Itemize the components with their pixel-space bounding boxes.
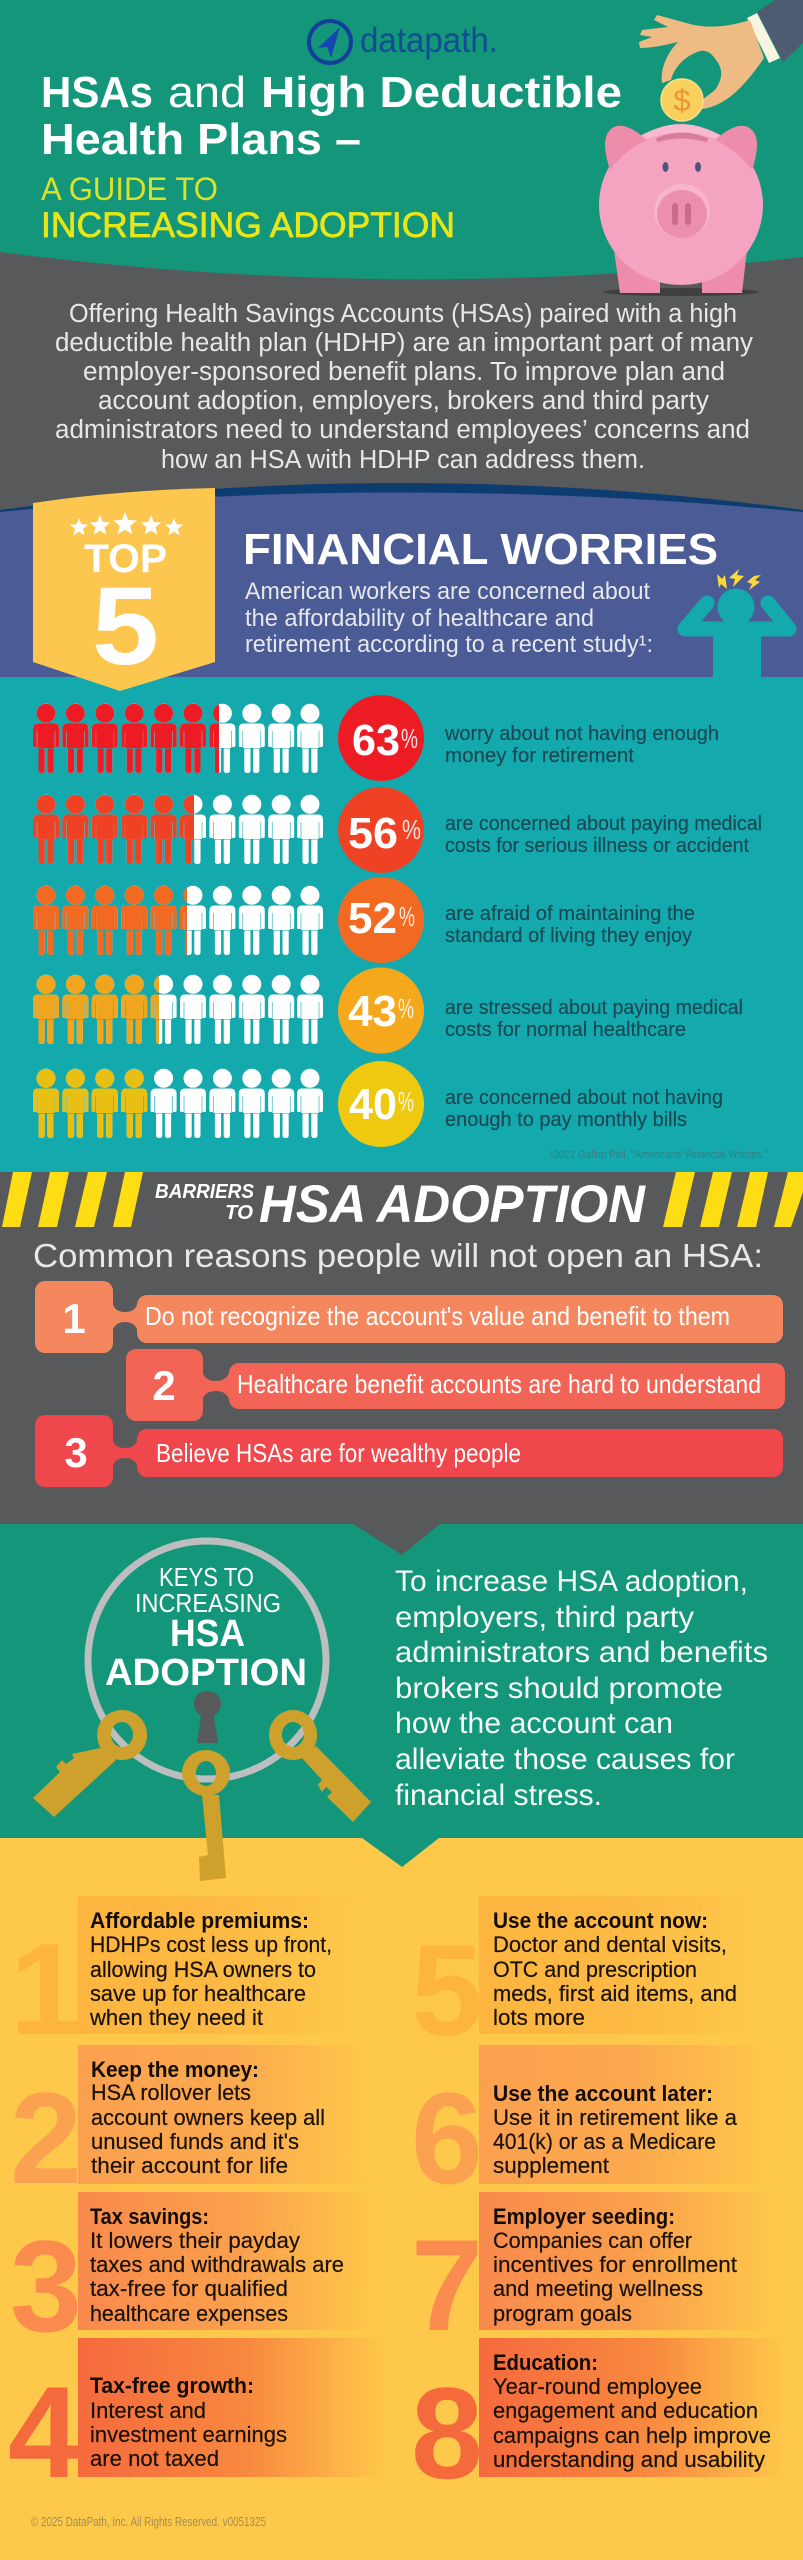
caution stripes bbox=[2, 1172, 803, 1227]
heading: barriers to HSA adoption: TO bbox=[225, 1202, 253, 1224]
key 1: affordable premiums: allowing HSA owners to bbox=[90, 1957, 316, 1982]
stat row: 40 percent: 40 bbox=[349, 1080, 397, 1129]
key 1: affordable premiums: 1 bbox=[10, 1916, 82, 2062]
intro paragraph: Offering Health Savings Accounts (HSAs) paired with a high bbox=[69, 300, 737, 328]
key 5: use the account now: lots more bbox=[493, 2005, 585, 2030]
key 1: affordable premiums bbox=[10, 1896, 355, 2062]
key 5: use the account now: meds, first aid items, and bbox=[493, 1981, 737, 2006]
key 8: education: Education: bbox=[493, 2350, 598, 2375]
subheading: Common reasons people will not open an HSA: bbox=[33, 1237, 763, 1274]
subtitle bbox=[41, 171, 455, 245]
key 3: tax savings: Tax savings: bbox=[90, 2204, 209, 2229]
key 7: employer seeding: incentives for enrollment bbox=[493, 2252, 737, 2277]
key 3: tax savings: taxes and withdrawals are bbox=[90, 2252, 344, 2277]
key 6: use the account later: 6 bbox=[411, 2065, 483, 2211]
intro paragraph bbox=[55, 300, 753, 474]
adoption paragraph: financial stress. bbox=[395, 1779, 602, 1812]
key 7: employer seeding: and meeting wellness bbox=[493, 2276, 703, 2301]
intro paragraph: how an HSA with HDHP can address them. bbox=[161, 446, 645, 474]
key 5: use the account now: Doctor and dental visits, bbox=[493, 1932, 727, 1957]
stat row: 40 percent: are concerned about not having bbox=[445, 1087, 723, 1109]
key 8: education: campaigns can help improve bbox=[493, 2423, 771, 2448]
badge: top 5: 5 bbox=[92, 565, 159, 688]
intro paragraph: employer-sponsored benefit plans. To improve plan and bbox=[83, 358, 725, 386]
key 2: keep the money: Keep the money: bbox=[91, 2057, 259, 2082]
key 3: tax savings: It lowers their payday bbox=[90, 2228, 300, 2253]
barrier 2 bbox=[126, 1349, 785, 1421]
stat row: 43 percent: are stressed about paying medical bbox=[445, 997, 743, 1019]
key 1: affordable premiums: save up for healthcare bbox=[90, 1981, 306, 2006]
badge: top 5: TOP bbox=[84, 537, 167, 581]
key 2: keep the money: account owners keep all bbox=[91, 2105, 325, 2130]
stat row: 63 percent: money for retirement bbox=[445, 745, 634, 767]
key 3: tax savings bbox=[10, 2192, 375, 2359]
copyright: © 2025 DataPath, Inc. All Rights Reserved. v0051325 bbox=[31, 2515, 266, 2529]
panel: header bbox=[0, 0, 803, 296]
stat row: 52 percent: % bbox=[399, 901, 415, 932]
key 5: use the account now: Use the account now: bbox=[493, 1908, 708, 1933]
key 5: use the account now: OTC and prescription bbox=[493, 1957, 697, 1982]
footnote: ¹2022 Gallup Poll, "Americans' Financial Worries." bbox=[550, 1149, 768, 1161]
key 4: tax-free growth: are not taxed bbox=[90, 2446, 219, 2471]
key 4: tax-free growth: investment earnings bbox=[90, 2422, 287, 2447]
stat row: 40 percent: % bbox=[398, 1086, 414, 1117]
title: HSAs bbox=[41, 68, 153, 117]
banner description: American workers are concerned about bbox=[245, 578, 650, 605]
barrier 2: 2 bbox=[152, 1362, 176, 1409]
key 8: education: Year-round employee bbox=[493, 2374, 702, 2399]
key 3: tax savings: healthcare expenses bbox=[90, 2301, 288, 2326]
key 5: use the account now bbox=[411, 1896, 756, 2063]
key 8: education bbox=[411, 2338, 786, 2506]
title: and bbox=[168, 68, 246, 117]
panel: keys to increasing HSA adoption bbox=[0, 1524, 803, 1881]
stat row: 56 percent: costs for serious illness or accident bbox=[445, 835, 749, 857]
banner description: retirement according to a recent study¹: bbox=[245, 631, 653, 658]
key 6: use the account later: supplement bbox=[493, 2153, 609, 2178]
barrier 1: Do not recognize the account's value and benefit to them bbox=[145, 1301, 730, 1331]
key 4: tax-free growth bbox=[8, 2338, 385, 2505]
title bbox=[41, 68, 622, 164]
subtitle: INCREASING ADOPTION bbox=[41, 206, 455, 245]
barrier 3 bbox=[35, 1415, 783, 1487]
stat row: 63 percent bbox=[33, 695, 719, 781]
stat row: 52 percent bbox=[33, 877, 695, 963]
key 7: employer seeding: program goals bbox=[493, 2301, 632, 2326]
icon: piggy bank bbox=[599, 124, 763, 296]
key 7: employer seeding: 7 bbox=[411, 2212, 483, 2358]
key 7: employer seeding: Employer seeding: bbox=[493, 2204, 675, 2229]
ring text: KEYS TO bbox=[159, 1562, 254, 1592]
heading: barriers to HSA adoption: BARRIERS bbox=[155, 1181, 255, 1203]
key 6: use the account later bbox=[411, 2045, 769, 2211]
logo: datapath bbox=[309, 21, 498, 63]
key 5: use the account now: 5 bbox=[411, 1917, 483, 2063]
key 4: tax-free growth: 4 bbox=[8, 2359, 80, 2505]
key 7: employer seeding: Companies can offer bbox=[493, 2228, 692, 2253]
badge: top 5 bbox=[33, 488, 215, 691]
banner description bbox=[245, 578, 653, 658]
heading: barriers to HSA adoption: HSA ADOPTION bbox=[259, 1175, 647, 1234]
logo: datapath: datapath. bbox=[360, 21, 498, 60]
barrier 3: Believe HSAs are for wealthy people bbox=[156, 1438, 521, 1468]
key 8: education: 8 bbox=[411, 2360, 483, 2506]
stat row: 43 percent: costs for normal healthcare bbox=[445, 1019, 686, 1041]
key 2: keep the money: HSA rollover lets bbox=[91, 2080, 251, 2105]
key 6: use the account later: Use it in retirement like a bbox=[493, 2105, 738, 2130]
intro paragraph: administrators need to understand employees’ concerns and bbox=[55, 416, 750, 444]
key 3: tax savings: 3 bbox=[10, 2213, 82, 2359]
barrier 1 bbox=[35, 1281, 783, 1353]
key 4: tax-free growth: Tax-free growth: bbox=[90, 2373, 254, 2398]
ring text: HSA bbox=[170, 1613, 245, 1655]
key 4: tax-free growth: Interest and bbox=[90, 2398, 206, 2423]
stat row: 56 percent: % bbox=[402, 814, 421, 845]
adoption paragraph: how the account can bbox=[395, 1707, 673, 1740]
barrier 3: 3 bbox=[64, 1429, 88, 1476]
adoption paragraph: alleviate those causes for bbox=[395, 1743, 735, 1776]
ring text: INCREASING bbox=[135, 1588, 281, 1618]
adoption paragraph: brokers should promote bbox=[395, 1672, 723, 1705]
panel: introduction bbox=[0, 240, 803, 520]
intro paragraph: account adoption, employers, brokers and third party bbox=[98, 387, 709, 415]
panel: top 5 financial worries banner bbox=[0, 483, 803, 691]
heading: financial worries: FINANCIAL WORRIES bbox=[243, 525, 718, 574]
key 6: use the account later: Use the account later: bbox=[493, 2081, 713, 2106]
gray pointer bbox=[353, 1524, 440, 1555]
icon: hand and coin bbox=[639, 0, 803, 121]
title: High Deductible bbox=[261, 68, 622, 117]
intro paragraph: deductible health plan (HDHP) are an important part of many bbox=[55, 329, 753, 357]
stat row: 52 percent: standard of living they enjoy bbox=[445, 925, 692, 947]
icon: stressed person bbox=[685, 569, 789, 678]
key 8: education: understanding and usability bbox=[493, 2447, 765, 2472]
key 2: keep the money: their account for life bbox=[91, 2153, 288, 2178]
stat row: 43 percent: % bbox=[398, 993, 414, 1024]
stat row: 43 percent: 43 bbox=[348, 987, 397, 1036]
key 2: keep the money bbox=[10, 2045, 368, 2211]
stat row: 52 percent: are afraid of maintaining the bbox=[445, 903, 695, 925]
adoption paragraph bbox=[395, 1565, 768, 1812]
panel: eight keys list bbox=[0, 1830, 803, 2560]
stat row: 40 percent bbox=[33, 1061, 723, 1147]
key 8: education: engagement and education bbox=[493, 2398, 758, 2423]
icon: key ring and keys bbox=[33, 1541, 371, 1881]
stat row: 63 percent: worry about not having enough bbox=[444, 723, 719, 745]
key 1: affordable premiums: when they need it bbox=[89, 2005, 263, 2030]
stat row: 56 percent bbox=[33, 787, 762, 873]
stat row: 63 percent: % bbox=[401, 723, 418, 754]
panel: financial worries statistics bbox=[0, 670, 803, 1173]
stat row: 56 percent: 56 bbox=[348, 809, 398, 858]
subtitle: A GUIDE TO bbox=[41, 171, 218, 207]
ring text bbox=[105, 1562, 307, 1694]
stat row: 43 percent bbox=[33, 968, 743, 1054]
key 1: affordable premiums: Affordable premiums: bbox=[90, 1908, 309, 1933]
barrier 1: 1 bbox=[62, 1295, 86, 1342]
panel: barriers to HSA adoption bbox=[0, 1172, 803, 1527]
adoption paragraph: To increase HSA adoption, bbox=[395, 1565, 748, 1598]
key 7: employer seeding bbox=[411, 2192, 776, 2358]
banner description: the affordability of healthcare and bbox=[245, 605, 594, 632]
adoption paragraph: administrators and benefits bbox=[395, 1636, 768, 1669]
key 2: keep the money: unused funds and it's bbox=[91, 2129, 299, 2154]
key 2: keep the money: 2 bbox=[10, 2065, 82, 2211]
stat row: 40 percent: enough to pay monthly bills bbox=[445, 1109, 687, 1131]
adoption paragraph: employers, third party bbox=[395, 1601, 694, 1634]
key 6: use the account later: 401(k) or as a Medicare bbox=[493, 2129, 716, 2154]
key 3: tax savings: tax-free for qualified bbox=[90, 2276, 288, 2301]
stat row: 56 percent: are concerned about paying medical bbox=[445, 813, 762, 835]
stat row: 63 percent: 63 bbox=[352, 716, 400, 765]
icon: keyhole bbox=[194, 1691, 221, 1743]
title: Health Plans – bbox=[41, 115, 361, 164]
stat row: 52 percent: 52 bbox=[348, 894, 397, 943]
ring text: ADOPTION bbox=[105, 1652, 307, 1694]
icon: hand and coin: $ bbox=[673, 83, 691, 118]
key 1: affordable premiums: HDHPs cost less up front, bbox=[90, 1932, 332, 1957]
